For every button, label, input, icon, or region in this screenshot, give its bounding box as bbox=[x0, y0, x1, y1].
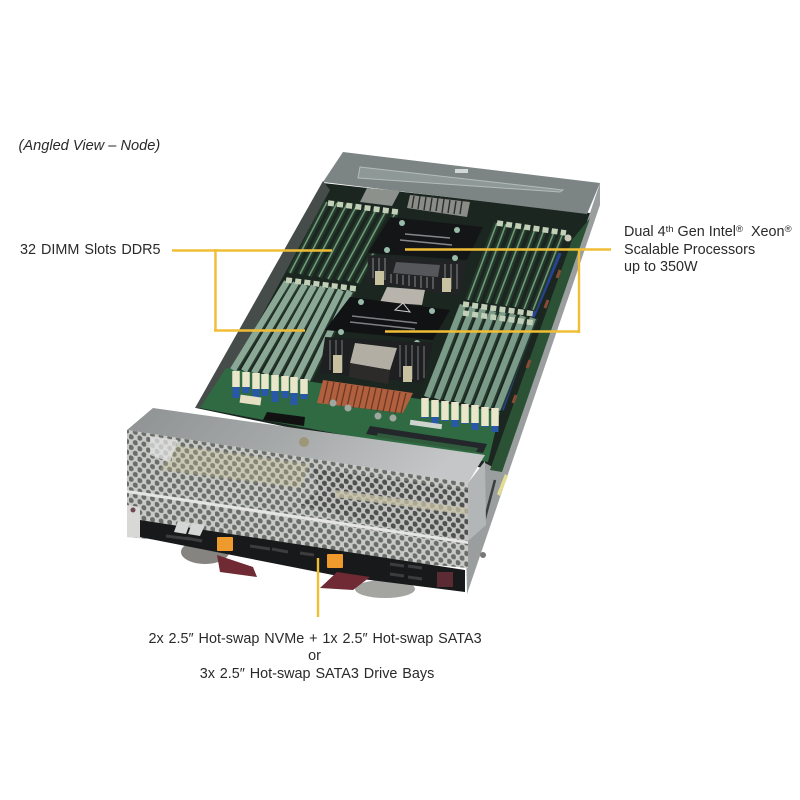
screw bbox=[480, 552, 486, 558]
label: processors: th bbox=[666, 224, 674, 235]
memory: lower right bbox=[427, 305, 538, 410]
drive discs bbox=[181, 540, 229, 564]
callout lines: memory bbox=[172, 249, 332, 331]
orange latch 2 bbox=[327, 554, 343, 568]
rear panel bbox=[323, 152, 600, 214]
processor 2 cover plate bbox=[325, 297, 450, 340]
control panel bbox=[127, 505, 140, 538]
label: processors: up to 350W bbox=[624, 259, 698, 275]
drive bays bbox=[140, 520, 465, 592]
memory: lower left bbox=[233, 282, 354, 380]
front board details bbox=[240, 395, 487, 453]
label: processors: Xeon bbox=[743, 224, 785, 240]
label: drive bays: or bbox=[308, 648, 321, 664]
memory clips: front right bbox=[425, 398, 495, 432]
label: drive bays: 2x 2.5″ Hot-swap NVMe + 1x 2.5″ Hot-swap SATA3 bbox=[148, 631, 482, 647]
drive cage: lower mesh bbox=[127, 490, 468, 568]
label: processors: Gen Intel bbox=[674, 224, 736, 240]
memory: top left bbox=[290, 202, 397, 283]
right side wall bbox=[466, 183, 600, 594]
label: processors: Dual 4 bbox=[624, 224, 792, 240]
chassis interior bbox=[196, 183, 590, 472]
processor 2 silver block bbox=[350, 343, 397, 370]
orange latch 1 bbox=[217, 537, 233, 551]
label: memory: 32 DIMM Slots DDR5 bbox=[20, 242, 161, 258]
memory: top right bbox=[468, 223, 563, 310]
label: processors: Scalable Processors bbox=[624, 242, 755, 258]
node chassis bbox=[127, 152, 600, 598]
drive cage: top cover bbox=[127, 408, 485, 483]
processor 2 heatsink bbox=[320, 337, 433, 383]
label: drive bays: 3x 2.5″ Hot-swap SATA3 Drive Bays bbox=[200, 666, 434, 682]
processor 1 heatsink bbox=[367, 255, 467, 296]
board: front pcb bbox=[200, 368, 500, 462]
processor 2 bbox=[320, 297, 450, 384]
label: processors: ® bbox=[736, 224, 743, 235]
blue riser lines bbox=[502, 253, 560, 410]
drive cage: upper mesh bbox=[127, 430, 468, 541]
copper heatsink bbox=[317, 380, 413, 414]
processor 1 bbox=[367, 217, 483, 305]
memory latches bbox=[286, 203, 566, 323]
label: view: (Angled View – Node) bbox=[18, 138, 160, 154]
callout lines: processors bbox=[385, 249, 611, 333]
processor 1 cover plate bbox=[368, 217, 483, 260]
fins: rear heatsink bbox=[407, 195, 470, 217]
callout line: drive bays bbox=[317, 558, 319, 617]
left side rail bbox=[195, 181, 330, 408]
silver tabs bbox=[174, 521, 205, 536]
board: rear connector bbox=[360, 188, 400, 206]
drive cage: right corner bbox=[468, 461, 486, 541]
memory clips: front left bbox=[236, 371, 304, 405]
processor 1 silver block bbox=[380, 287, 425, 305]
drive handles bbox=[217, 555, 370, 590]
label: processors: ® bbox=[785, 224, 792, 235]
board: right pcb strip bbox=[490, 218, 590, 472]
red button bbox=[437, 572, 453, 587]
